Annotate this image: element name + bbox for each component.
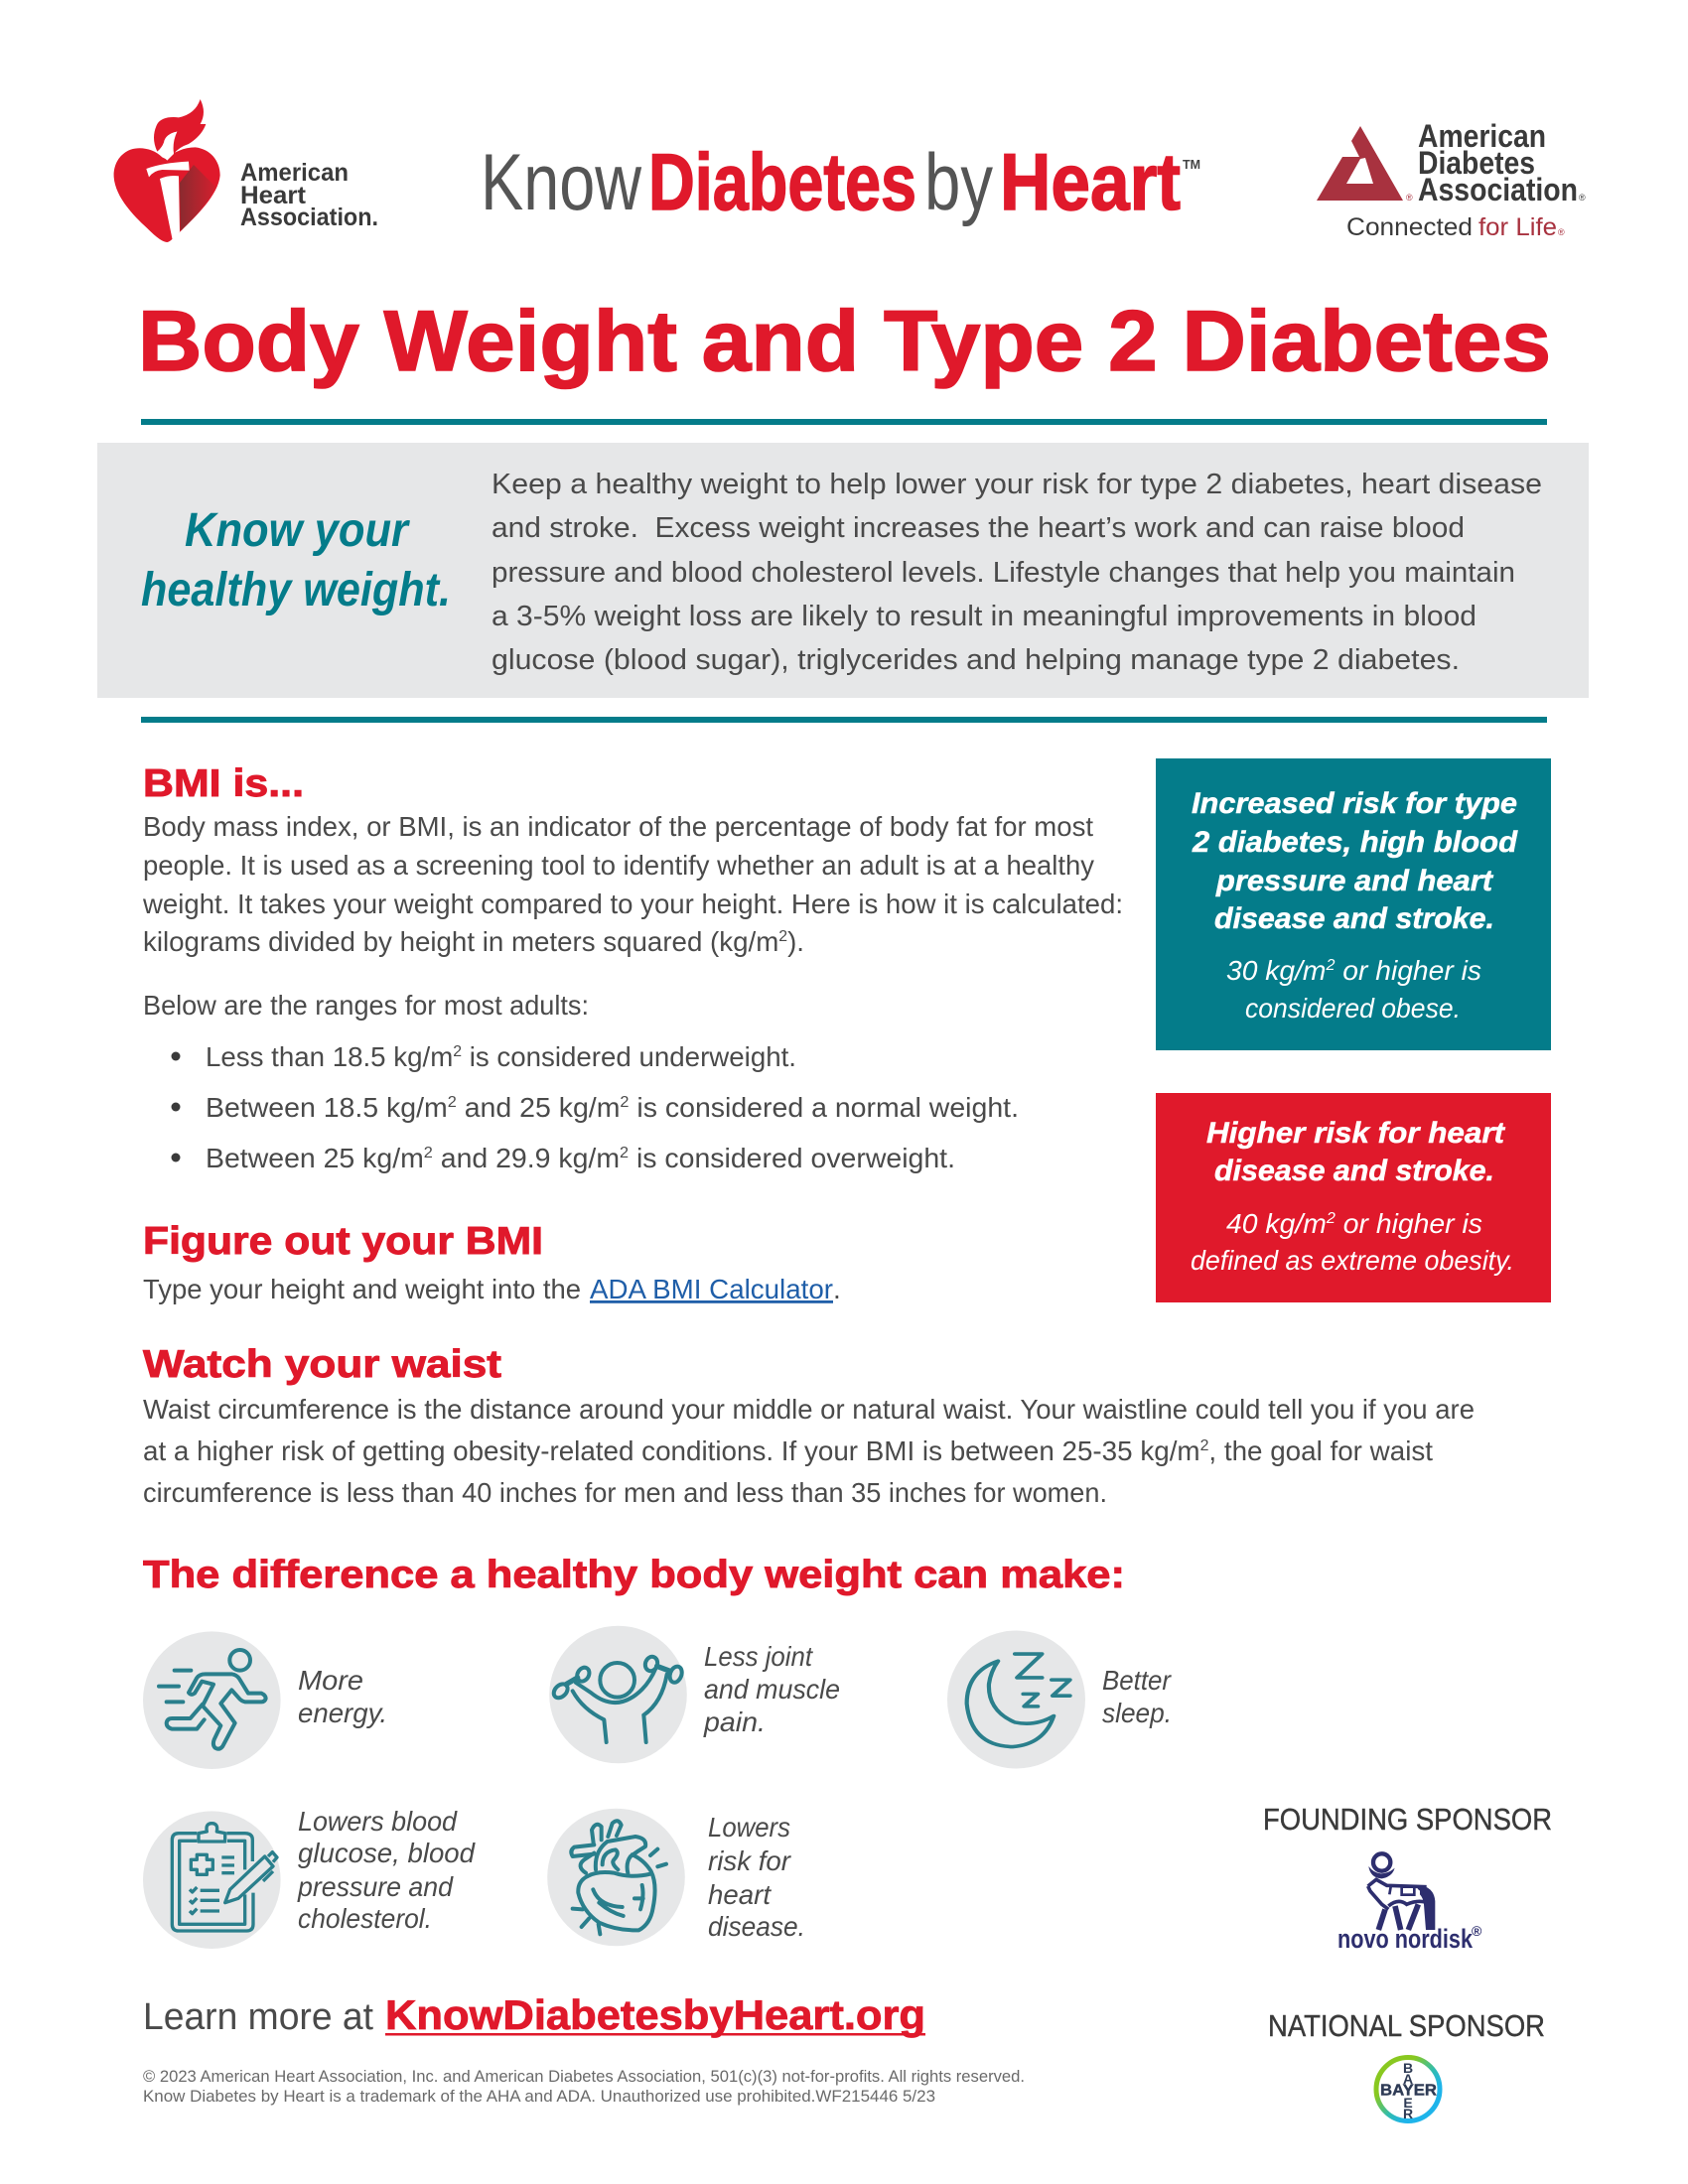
calculator sentence: ADA BMI Calculator: [590, 1274, 833, 1304]
waist paragraph: circumference is less than 40 inches for men and less than 35 inches for women.: [143, 1477, 1107, 1508]
ADA wordmark: [1346, 118, 1586, 241]
ADA wordmark: Association: [1418, 172, 1578, 207]
panel: intro: [97, 443, 1589, 698]
label: [703, 1641, 840, 1737]
label: pressure and: [297, 1871, 454, 1902]
logo: Bayer: A: [1403, 2071, 1413, 2087]
label: Less joint: [704, 1641, 813, 1672]
label: More: [298, 1665, 363, 1696]
ranges list: Less than 18.5 kg/m: [206, 1041, 456, 1072]
icon: clipboard and pen: [172, 1824, 277, 1931]
label: glucose, blood: [298, 1838, 476, 1868]
label: sleep.: [1102, 1698, 1172, 1728]
label: pain.: [703, 1706, 766, 1737]
waist paragraph: Waist circumference is the distance around your middle or natural waist. Your waistline could tell you if you are: [143, 1394, 1475, 1425]
callout: extreme obesity: 2: [1326, 1210, 1336, 1227]
intro paragraph: pressure and blood cholesterol levels. Lifestyle changes that help you maintain: [492, 557, 1515, 589]
ranges list: and 25 kg/m: [457, 1092, 620, 1123]
waist paragraph: at a higher risk of getting obesity-related conditions. If your BMI is between 25-35 kg/m: [143, 1435, 1207, 1466]
intro paragraph: [492, 469, 1542, 676]
copyright: © 2023 American Heart Association, Inc. and American Diabetes Association, 501(c)(3) not-for-profits. All rights reserved.: [143, 2067, 1025, 2086]
callout: obese: disease and stroke.: [1214, 902, 1494, 935]
label: [708, 1812, 805, 1942]
heading: Figure out your BMI: [143, 1220, 543, 1263]
logo: Know Diabetes by Heart: TM: [1183, 157, 1200, 172]
logo: Bayer: R: [1403, 2106, 1413, 2121]
logo: Bayer: [1376, 2057, 1440, 2121]
waist paragraph: 2: [1200, 1437, 1209, 1454]
logo: Bayer: B: [1403, 2060, 1413, 2076]
section: watch your waist: [143, 1343, 1475, 1508]
logo: Novo Nordisk: ®: [1472, 1923, 1482, 1939]
benefit: less joint and muscle pain: [549, 1626, 840, 1763]
tagline: Know your: [185, 504, 410, 557]
national sponsor: [1268, 2008, 1545, 2121]
benefit: better sleep: [947, 1630, 1173, 1769]
intro paragraph: and stroke. Excess weight increases the heart’s work and can raise blood: [492, 512, 1465, 544]
ranges list: is considered a normal weight.: [629, 1092, 1019, 1123]
icon: person lifting: [551, 1655, 684, 1742]
ranges list: Between 18.5 kg/m: [206, 1092, 444, 1123]
copyright: Know Diabetes by Heart is a trademark of the AHA and ADA. Unauthorized use prohibited.WF215446 5/23: [143, 2087, 935, 2106]
title: Body Weight and Type 2 Diabetes: [138, 294, 1551, 389]
ranges list: 2: [620, 1094, 630, 1111]
logo: American Diabetes Association: [1317, 118, 1586, 241]
logo: Know Diabetes by Heart: Heart: [1000, 138, 1181, 227]
ranges list: Between 25 kg/m: [206, 1143, 420, 1173]
logo: Know Diabetes by Heart: Diabetes: [648, 138, 916, 227]
calculator sentence: Type your height and weight into the: [143, 1274, 581, 1304]
label: risk for: [708, 1845, 792, 1876]
callout: obese: 30 kg/m: [1226, 955, 1326, 986]
waist paragraph: [143, 1394, 1475, 1508]
copyright: [143, 2067, 1025, 2106]
wordmark: novo nordisk: [1337, 1924, 1474, 1954]
ADA wordmark: Connected: [1346, 213, 1473, 241]
icon: anatomical heart: [571, 1821, 666, 1934]
AHA wordmark: Heart: [240, 182, 307, 209]
heading: the difference: The difference a healthy body weight can make:: [143, 1554, 1125, 1596]
tagline: healthy weight.: [141, 564, 451, 616]
BMI description: kilograms divided by height in meters squared (kg/m: [143, 926, 785, 957]
logo: Bayer: E: [1403, 2095, 1413, 2111]
BMI description: weight. It takes your weight compared to your height. Here is how it is calculated:: [142, 888, 1123, 919]
ranges list: 2: [453, 1043, 462, 1060]
ranges list: and 29.9 kg/m: [433, 1143, 620, 1173]
label: and muscle: [704, 1674, 840, 1705]
calculator sentence: .: [833, 1274, 841, 1304]
sponsor heading: FOUNDING SPONSOR: [1263, 1802, 1552, 1837]
ADA wordmark: ®: [1558, 227, 1565, 237]
ADA wordmark: for Life: [1478, 213, 1557, 241]
callout: extreme obesity: disease and stroke.: [1214, 1155, 1494, 1187]
callout: extreme obesity: Higher risk for heart: [1206, 1117, 1506, 1150]
label: cholesterol.: [298, 1903, 432, 1934]
callout: obese: or higher is: [1335, 955, 1481, 986]
heading: Watch your waist: [143, 1343, 501, 1386]
label: energy.: [298, 1698, 387, 1728]
calculator sentence: [143, 1274, 841, 1304]
BMI description: Body mass index, or BMI, is an indicator of the percentage of body fat for most: [143, 811, 1093, 842]
BMI description: [142, 811, 1123, 957]
ADA wordmark: ®: [1579, 193, 1586, 203]
label: Lowers: [708, 1812, 790, 1843]
founding sponsor: [1263, 1802, 1552, 1954]
intro paragraph: a 3-5% weight loss are likely to result in meaningful improvements in blood: [492, 601, 1477, 632]
logo: Novo Nordisk: [1337, 1853, 1482, 1954]
callout: obese: Increased risk for type: [1192, 787, 1517, 820]
ranges list: [171, 1041, 1019, 1173]
logo: Bayer: BAYER: [1380, 2083, 1437, 2099]
icon: ADA triangle: [1317, 126, 1403, 201]
ranges list: 2: [620, 1145, 629, 1161]
logo: American Heart Association: [114, 99, 378, 242]
callout: obese: 2: [1325, 957, 1336, 974]
callout: obese: [1156, 758, 1551, 1050]
icon: runner: [159, 1650, 266, 1749]
BMI description: ).: [787, 926, 804, 957]
heading: BMI is...: [143, 762, 304, 805]
section: BMI is: [142, 762, 1123, 1173]
ranges list: is considered overweight.: [629, 1143, 955, 1173]
benefit: lowers blood glucose: [143, 1806, 476, 1949]
callout: obese: considered obese.: [1245, 993, 1461, 1024]
ADA wordmark: ®: [1406, 193, 1413, 203]
BMI description: 2: [778, 928, 787, 945]
callout: extreme obesity: 40 kg/m: [1226, 1208, 1326, 1239]
tagline: [141, 504, 451, 616]
logo: Know Diabetes by Heart: [481, 138, 1200, 227]
ranges list: 2: [448, 1094, 457, 1111]
icon: moon and z letters: [967, 1654, 1070, 1747]
ranges intro: Below are the ranges for most adults:: [143, 990, 589, 1021]
callout: extreme obesity: [1156, 1093, 1551, 1302]
label: [298, 1665, 387, 1728]
learn more call to action: KnowDiabetesbyHeart.org: [385, 1991, 925, 2038]
label: disease.: [708, 1911, 805, 1942]
ADA wordmark: Diabetes: [1418, 145, 1535, 181]
label: [1102, 1665, 1173, 1728]
intro paragraph: glucose (blood sugar), triglycerides and helping manage type 2 diabetes.: [492, 644, 1460, 676]
sponsor heading: NATIONAL SPONSOR: [1268, 2008, 1545, 2043]
label: [297, 1806, 476, 1934]
learn more call to action: [143, 1991, 925, 2038]
ranges list: 2: [424, 1145, 433, 1161]
waist paragraph: , the goal for waist: [1208, 1435, 1433, 1466]
AHA wordmark: Association.: [240, 204, 378, 231]
benefit: lowers risk for heart disease: [547, 1809, 805, 1946]
callout: obese: 2 diabetes, high blood: [1192, 826, 1518, 859]
AHA wordmark: [240, 159, 378, 231]
label: Better: [1102, 1665, 1173, 1696]
section: figure out your BMI: [143, 1220, 841, 1304]
logo: Know Diabetes by Heart: by: [924, 138, 993, 227]
learn more call to action: Learn more at: [143, 1996, 373, 2038]
label: Lowers blood: [298, 1806, 458, 1837]
icon: bull: [1368, 1853, 1435, 1930]
benefit: more energy: [143, 1631, 387, 1769]
intro paragraph: Keep a healthy weight to help lower your risk for type 2 diabetes, heart disease: [492, 469, 1542, 500]
callout: extreme obesity: or higher is: [1336, 1208, 1482, 1239]
logo: Know Diabetes by Heart: Know: [481, 138, 641, 227]
label: heart: [708, 1879, 772, 1910]
callout: extreme obesity: defined as extreme obesity.: [1191, 1245, 1514, 1276]
AHA wordmark: American: [240, 159, 349, 187]
callout: obese: pressure and heart: [1215, 865, 1494, 897]
ADA wordmark: American: [1418, 118, 1546, 154]
icon: heart and torch: [114, 99, 220, 242]
ranges list: is considered underweight.: [462, 1041, 796, 1072]
BMI description: people. It is used as a screening tool to identify whether an adult is at a healthy: [143, 850, 1094, 881]
